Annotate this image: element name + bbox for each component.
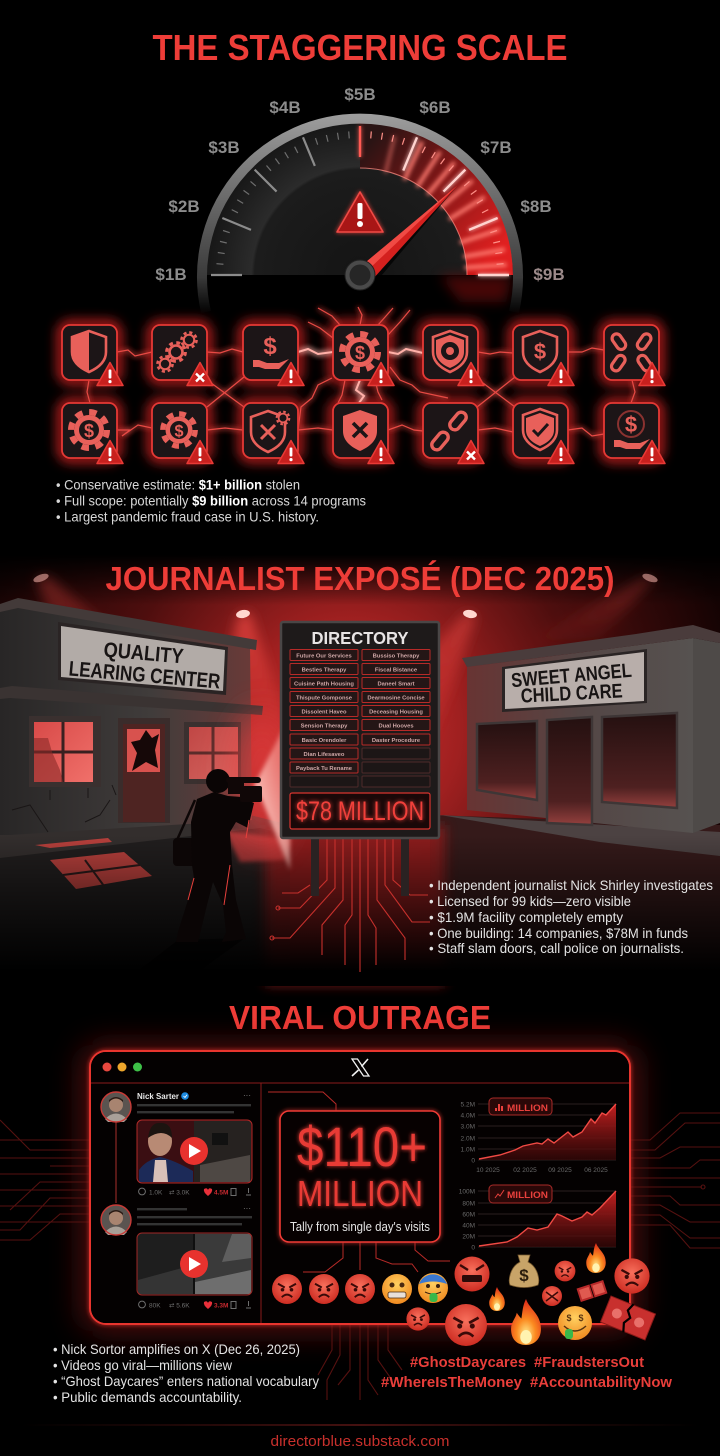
post 2 [101, 1204, 252, 1310]
browser glow [82, 1045, 638, 1331]
gridlines [478, 1104, 616, 1160]
text block: scale bullets: • Full scope: potentially $9 billion across 14 programs [56, 492, 366, 508]
tally panel [280, 1111, 440, 1242]
scale labels: $2B [168, 197, 200, 216]
icon: shield check [513, 403, 574, 464]
red zone [360, 122, 513, 275]
cursing face [454, 1256, 490, 1292]
browser window [90, 1051, 630, 1324]
sign [58, 622, 228, 695]
left window [29, 716, 101, 787]
roof [0, 598, 257, 650]
directory board [281, 622, 439, 838]
big angry right [614, 1258, 650, 1294]
hashtags: #WhereIsTheMoney [381, 1374, 523, 1391]
icon: gear dollar 2 [62, 403, 123, 464]
text bars [137, 1104, 251, 1113]
red glow below gauge [440, 276, 512, 302]
sign: LEARING CENTER [68, 657, 221, 694]
hashtags: #AccountabilityNow [530, 1374, 672, 1391]
head [206, 769, 230, 793]
engagement 2 [139, 1301, 251, 1310]
directory names: Dissolent Haveo [301, 710, 347, 716]
money-mouth face [558, 1306, 592, 1340]
icon: hand coin [604, 403, 665, 464]
icon: hand coin: $ [625, 412, 637, 437]
directory names: Daster Procedure [372, 738, 421, 744]
icon: hand dollar [243, 325, 304, 386]
text block: exposé bullets: • One building: 14 companies, $78M in funds [429, 925, 688, 941]
emoji pile [272, 1243, 656, 1346]
directory names [294, 654, 425, 772]
gauge face [207, 122, 513, 275]
chart 2 [459, 1185, 616, 1252]
axis labels: 20M [462, 1234, 475, 1240]
wall [0, 604, 252, 835]
engagement 2: 80K [149, 1302, 161, 1310]
icon: gear dollar [333, 325, 394, 386]
title: the staggering scale: THE STAGGERING SCALE [152, 27, 568, 68]
fire small right [586, 1243, 606, 1273]
verified badge [181, 1092, 189, 1100]
right window [184, 722, 241, 784]
icon: half shield [62, 325, 123, 386]
video 1 [137, 1120, 252, 1183]
directory posts [311, 836, 409, 896]
money-mouth face: $ [566, 1313, 572, 1323]
axis labels: 3.0M [461, 1124, 475, 1130]
avatar [101, 1092, 131, 1122]
side wall [693, 638, 720, 833]
text block: exposé bullets: • Staff slam doors, call police on journalists. [429, 940, 684, 956]
icon: solid shield x [333, 403, 394, 464]
window controls [102, 1062, 142, 1072]
body [176, 792, 254, 942]
scale labels: $5B [344, 85, 376, 104]
hashtags: #FraudstersOut [534, 1354, 644, 1371]
axis labels: 5.2M [461, 1102, 475, 1108]
text block: exposé bullets: • Licensed for 99 kids—zero visible [429, 893, 631, 909]
shadow [120, 938, 245, 985]
big angry centre [445, 1304, 487, 1346]
directory names: Fiscal Bistance [375, 668, 418, 674]
icon glow [62, 325, 659, 458]
roof [462, 625, 720, 667]
sign [502, 649, 647, 712]
icon: chain link break [423, 403, 484, 464]
date labels: 02 2025 [513, 1167, 537, 1174]
axis labels: 0 [471, 1158, 475, 1164]
X logo [352, 1059, 369, 1076]
money bag [509, 1255, 539, 1288]
area [479, 1191, 616, 1247]
scale labels: $1B [155, 265, 187, 284]
tally unit: MILLION [297, 1173, 423, 1214]
hashtags: #GhostDaycares [410, 1354, 526, 1371]
left building [0, 598, 263, 835]
red burst rays [385, 136, 507, 268]
directory names: Future Our Services [296, 654, 352, 660]
axis labels: 1.0M [461, 1146, 475, 1154]
directory names: Bussiso Therapy [373, 654, 420, 660]
text block: scale bullets: • Largest pandemic fraud case in U.S. history. [56, 508, 319, 524]
text block: viral bullets: • Nick Sortor amplifies on X (Dec 26, 2025) [53, 1341, 300, 1357]
door [118, 718, 170, 823]
icon: gears [152, 325, 213, 386]
empty directory rows [290, 748, 430, 787]
hub [345, 260, 375, 290]
tally connectors [268, 1092, 450, 1272]
scale labels: $6B [419, 98, 451, 117]
needle [366, 185, 458, 284]
minor ticks [216, 131, 349, 264]
axis labels [459, 1188, 475, 1252]
badge: MILLION [507, 1103, 548, 1114]
gridlines [478, 1191, 616, 1247]
directory names: Deceasing Housing [369, 710, 423, 716]
text block: viral bullets: • Public demands accountability. [53, 1389, 242, 1405]
date labels: 10 2025 [476, 1167, 500, 1174]
avatar [101, 1205, 131, 1235]
line [479, 1191, 616, 1246]
bag [173, 800, 199, 866]
thread line [115, 1122, 117, 1203]
small cursing face [542, 1286, 562, 1306]
hot minor ticks [371, 131, 504, 264]
more menu: ··· [243, 1091, 251, 1100]
tally number: $110+ [297, 1115, 427, 1178]
lightning network [87, 307, 635, 436]
sick money face [418, 1273, 448, 1303]
gauge [155, 85, 565, 312]
icon: gear dollar 3 [152, 403, 213, 464]
badge: MILLION [507, 1190, 548, 1201]
scale labels: $8B [520, 197, 552, 216]
board title: DIRECTORY [312, 628, 409, 648]
engagement 1: ⇄ 3.0K [169, 1190, 190, 1196]
post 1 [101, 1091, 252, 1203]
directory names: Besties Therapy [302, 668, 347, 674]
date labels: 06 2025 [584, 1167, 608, 1174]
play button 2 [180, 1250, 208, 1278]
angry faces row [272, 1274, 375, 1304]
directory names: Basic Orendoler [302, 738, 347, 744]
LED total [290, 793, 430, 829]
text bars [137, 1208, 252, 1225]
doorway [547, 717, 592, 825]
directory names: Dearmosine Concise [367, 696, 425, 702]
big fire [511, 1299, 541, 1345]
badge [489, 1098, 552, 1115]
major ticks hot [360, 126, 509, 275]
axis labels: 4.0M [461, 1112, 475, 1120]
camera [226, 777, 262, 802]
chart 1 [461, 1098, 616, 1174]
directory names: Sension Therapy [301, 724, 348, 730]
small cash [577, 1280, 607, 1302]
date labels [476, 1167, 608, 1174]
tally caption: Tally from single day's visits [290, 1220, 430, 1234]
axis labels: 60M [462, 1212, 475, 1218]
axis labels: 2.0M [461, 1136, 475, 1142]
text block: viral bullets [53, 1341, 319, 1405]
area [479, 1104, 616, 1160]
side circuit traces [0, 1113, 720, 1400]
hashtags [381, 1354, 672, 1391]
drips and cracks [12, 785, 116, 832]
directory names: Daneel Smart [377, 682, 415, 688]
axis labels: 80M [462, 1200, 475, 1208]
icon: shield dollar [513, 325, 574, 386]
LED total: $78 MILLION [296, 796, 424, 826]
video 2 [137, 1233, 252, 1295]
circuit traces below directory [270, 838, 430, 972]
text block: scale bullets [56, 476, 366, 524]
sign: SWEET ANGEL [510, 660, 633, 692]
broken bill [600, 1295, 656, 1341]
engagement 1: 1.0K [149, 1190, 163, 1196]
text block: exposé bullets: • $1.9M facility completely empty [429, 909, 623, 925]
title: journalist exposé: JOURNALIST EXPOSÉ (DEC 2025) [106, 560, 614, 597]
front wall [467, 638, 693, 833]
date labels: 09 2025 [548, 1167, 572, 1174]
directory names: Payback Tu Rename [296, 766, 353, 772]
icon: shield gear [423, 325, 484, 386]
engagement 1 [139, 1188, 251, 1196]
scale labels: $3B [208, 138, 240, 157]
sign: QUALITY [103, 639, 184, 668]
wall red wash [232, 710, 292, 850]
fire small left [489, 1287, 505, 1311]
warning triangle [337, 192, 383, 232]
footer rule [20, 1424, 700, 1426]
awning [0, 686, 263, 715]
text block: scale bullets: • Conservative estimate: $1+ billion stolen [56, 476, 300, 492]
scale labels: $9B [533, 265, 565, 284]
directory names: Thispute Gomponse [296, 696, 353, 702]
axis labels: 100M [459, 1188, 475, 1196]
icon: gear dollar 3: $ [174, 422, 184, 440]
text block: viral bullets: • “Ghost Daycares” enters national vocabulary [53, 1373, 319, 1389]
dividers [91, 1083, 629, 1323]
icon: shield dollar: $ [534, 339, 546, 364]
scale labels [155, 85, 565, 284]
engagement 2: 3.3M [214, 1302, 228, 1310]
footer source: directorblue.substack.com [270, 1434, 450, 1450]
major ticks grey [211, 137, 315, 275]
camera light beam [254, 715, 290, 870]
angry face lower left [406, 1307, 430, 1331]
engagement 2: ⇄ 5.6K [169, 1302, 190, 1310]
journalist silhouette [120, 769, 262, 985]
directory rows [290, 650, 430, 773]
sign: CHILD CARE [520, 680, 623, 708]
scale labels: $7B [480, 138, 512, 157]
directory names: Dian Lifesaveo [304, 752, 345, 758]
money-mouth face: $ [578, 1313, 584, 1323]
ground reflections [35, 838, 152, 889]
icon: broken chain [604, 325, 665, 386]
directory names: Cuisine Path Housing [294, 682, 354, 688]
text block: viral bullets: • Videos go viral—millions view [53, 1357, 233, 1373]
right building [462, 625, 720, 833]
window left empty [477, 721, 537, 800]
play button 1 [180, 1137, 208, 1165]
directory names: Dual Hooves [378, 724, 414, 730]
icon grid [62, 325, 665, 464]
line [479, 1104, 616, 1159]
scene background: journalist exposé [0, 555, 720, 985]
badge [489, 1185, 552, 1203]
inner dial arc [360, 168, 467, 275]
gauge ring [202, 119, 518, 312]
spotlight beams [32, 572, 659, 780]
icon: hand dollar: $ [263, 333, 277, 360]
engagement 1: 4.5M [214, 1190, 228, 1196]
icon: gear dollar 2: $ [84, 421, 94, 441]
icon: gear dollar: $ [355, 343, 365, 363]
axis labels: 0 [471, 1244, 475, 1252]
grimacing money face [382, 1274, 412, 1304]
icon: shield x gear [243, 403, 304, 464]
title: viral outrage: VIRAL OUTRAGE [229, 999, 491, 1036]
axis labels [461, 1102, 475, 1164]
ground [0, 815, 720, 985]
text block: exposé bullets [429, 877, 713, 956]
window right empty [602, 713, 677, 808]
scale labels: $4B [269, 98, 301, 117]
more menu: ··· [243, 1204, 251, 1213]
rim light [188, 820, 249, 905]
money bag: $ [519, 1266, 529, 1285]
name: Nick Sarter [137, 1091, 180, 1101]
scene ground fade [0, 835, 720, 986]
small angry face [555, 1261, 575, 1281]
axis labels: 40M [462, 1222, 475, 1230]
